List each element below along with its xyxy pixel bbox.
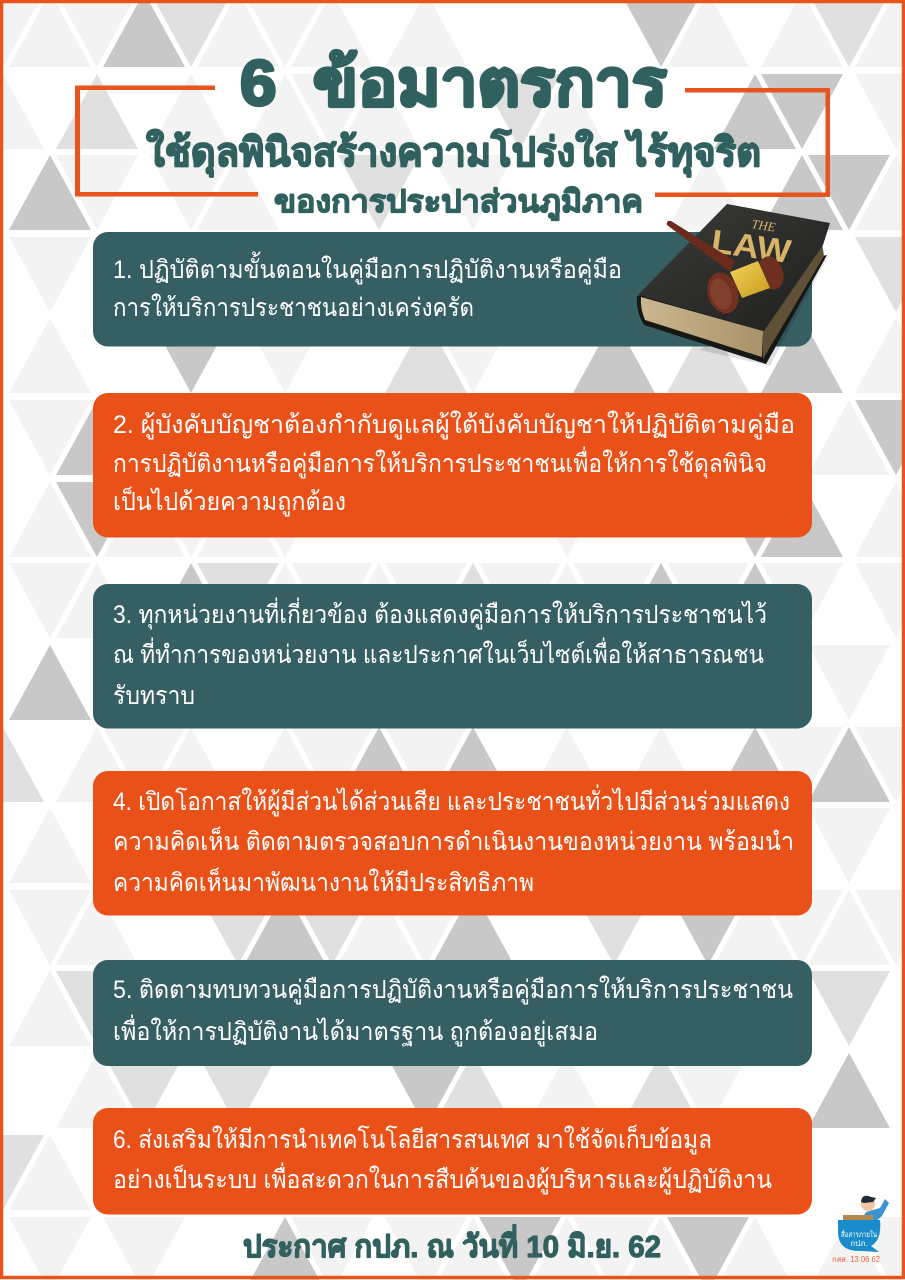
subheading second line: ของการประปาส่วนภูมิภาค [274, 184, 643, 221]
panel: measure 3: 3. ทุกหน่วยงานที่เกี่ยวข้อง ต้องแสดงคู่มือการให้บริการประชาชนไว้ [113, 597, 767, 630]
mascot boy [860, 1196, 889, 1223]
panel: measure 5 [93, 960, 812, 1066]
panel: measure 1: การให้บริการประชาชนอย่างเคร่งครัด [113, 293, 474, 322]
logo caption: กสส. 13 06 62 [832, 1255, 881, 1264]
panel: measure 2: เป็นไปด้วยความถูกต้อง [113, 486, 346, 517]
panel: measure 6 [93, 1108, 812, 1214]
icon: mascot logo [832, 1196, 889, 1264]
panel: measure 1 [93, 232, 812, 346]
book title LAW: LAW [709, 222, 794, 270]
panel: measure 2: การปฏิบัติงานหรือคู่มือการให้บริการประชาชนเพื่อให้การใช้ดุลพินิจ [113, 446, 767, 479]
panel: measure 2: 2. ผู้บังคับบัญชาต้องกำกับดูแลผู้ใต้บังคับบัญชาให้ปฏิบัติตามคู่มือ [113, 410, 795, 440]
panel: measure 5: เพื่อให้การปฏิบัติงานได้มาตรฐาน ถูกต้องอยู่เสมอ [113, 1014, 598, 1047]
panel: measure 2 [93, 393, 812, 538]
main heading: 6 ข้อมาตรการ [240, 47, 667, 119]
panel: measure 6: 6. ส่งเสริมให้มีการนำเทคโนโลยีสารสนเทศ มาใช้จัดเก็บข้อมูล [113, 1124, 712, 1155]
subheading: ใช้ดุลพินิจสร้างความโปร่งใส ไร้ทุจริต [146, 129, 761, 178]
panel: measure 3: ณ ที่ทำการของหน่วยงาน และประกาศในเว็บไซต์เพื่อให้สาธารณชน [113, 637, 764, 669]
book title THE: THE [751, 216, 777, 235]
panel: measure 4: ความคิดเห็นมาพัฒนางานให้มีประสิทธิภาพ [113, 867, 534, 897]
panel: measure 3 [93, 584, 812, 728]
panel: measure 3: รับทราบ [113, 682, 195, 710]
footer date: ประกาศ กปภ. ณ วันที่ 10 มิ.ย. 62 [243, 1224, 661, 1264]
panel: measure 4: 4. เปิดโอกาสให้ผู้มีส่วนได้ส่วนเสีย และประชาชนทั่วไปมีส่วนร่วมแสดง [113, 784, 790, 817]
icon: law book with gavel [637, 204, 830, 366]
icon: mascot logo: กปภ. [850, 1239, 868, 1248]
title [146, 47, 761, 221]
logo text: สื่อสารภายใน [841, 1229, 877, 1239]
panel: measure 5: 5. ติดตามทบทวนคู่มือการปฏิบัติงานหรือคู่มือการให้บริการประชาชน [113, 975, 793, 1005]
panel: measure 1: 1. ปฏิบัติตามขั้นตอนในคู่มือการปฏิบัติงานหรือคู่มือ [113, 251, 622, 285]
panel: measure 4 [93, 771, 812, 916]
panel: measure 4: ความคิดเห็น ติดตามตรวจสอบการดำเนินงานของหน่วยงาน พร้อมนำ [113, 826, 794, 856]
gavel [667, 221, 788, 318]
panel: measure 6: อย่างเป็นระบบ เพื่อสะดวกในการสืบค้นของผู้บริหารและผู้ปฏิบัติงาน [113, 1162, 772, 1195]
title frame [75, 86, 830, 197]
